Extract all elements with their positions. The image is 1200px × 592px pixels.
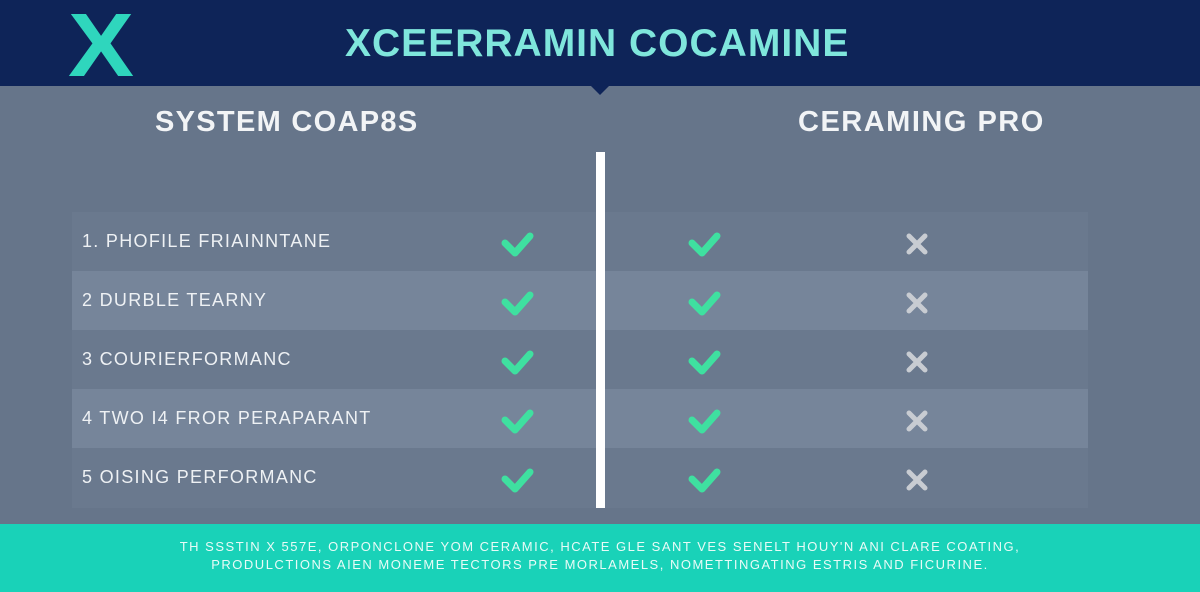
row labels: 3 COURIERFORMANC <box>82 349 292 369</box>
row labels: 4 TWO I4 FROR PERAPARANT <box>82 408 372 428</box>
footer <box>0 524 1200 592</box>
footer: PRODULCTIONS AIEN MONEME TECTORS PRE MORLAMELS, NOMETTINGATING ESTRIS AND FICURINE. <box>211 557 989 572</box>
column heading right: CERAMING PRO <box>798 106 1045 138</box>
header bar <box>0 0 1200 86</box>
footer: TH SSSTIN X 557E, ORPONCLONE YOM CERAMIC, HCATE GLE SANT VES SENELT HOUY'N ANI CLARE COATING, <box>180 539 1020 554</box>
icons <box>502 232 928 492</box>
row labels: 5 OISING PERFORMANC <box>82 467 318 487</box>
column heading left: SYSTEM COAP8S <box>155 106 418 138</box>
row labels <box>82 231 372 487</box>
notch <box>591 86 609 95</box>
table <box>72 231 1088 492</box>
row labels: 2 DURBLE TEARNY <box>82 290 267 310</box>
row labels: 1. PHOFILE FRIAINNTANE <box>82 231 331 251</box>
vertical divider <box>596 152 605 508</box>
title: XCEERRAMIN COCAMINE <box>345 22 849 65</box>
